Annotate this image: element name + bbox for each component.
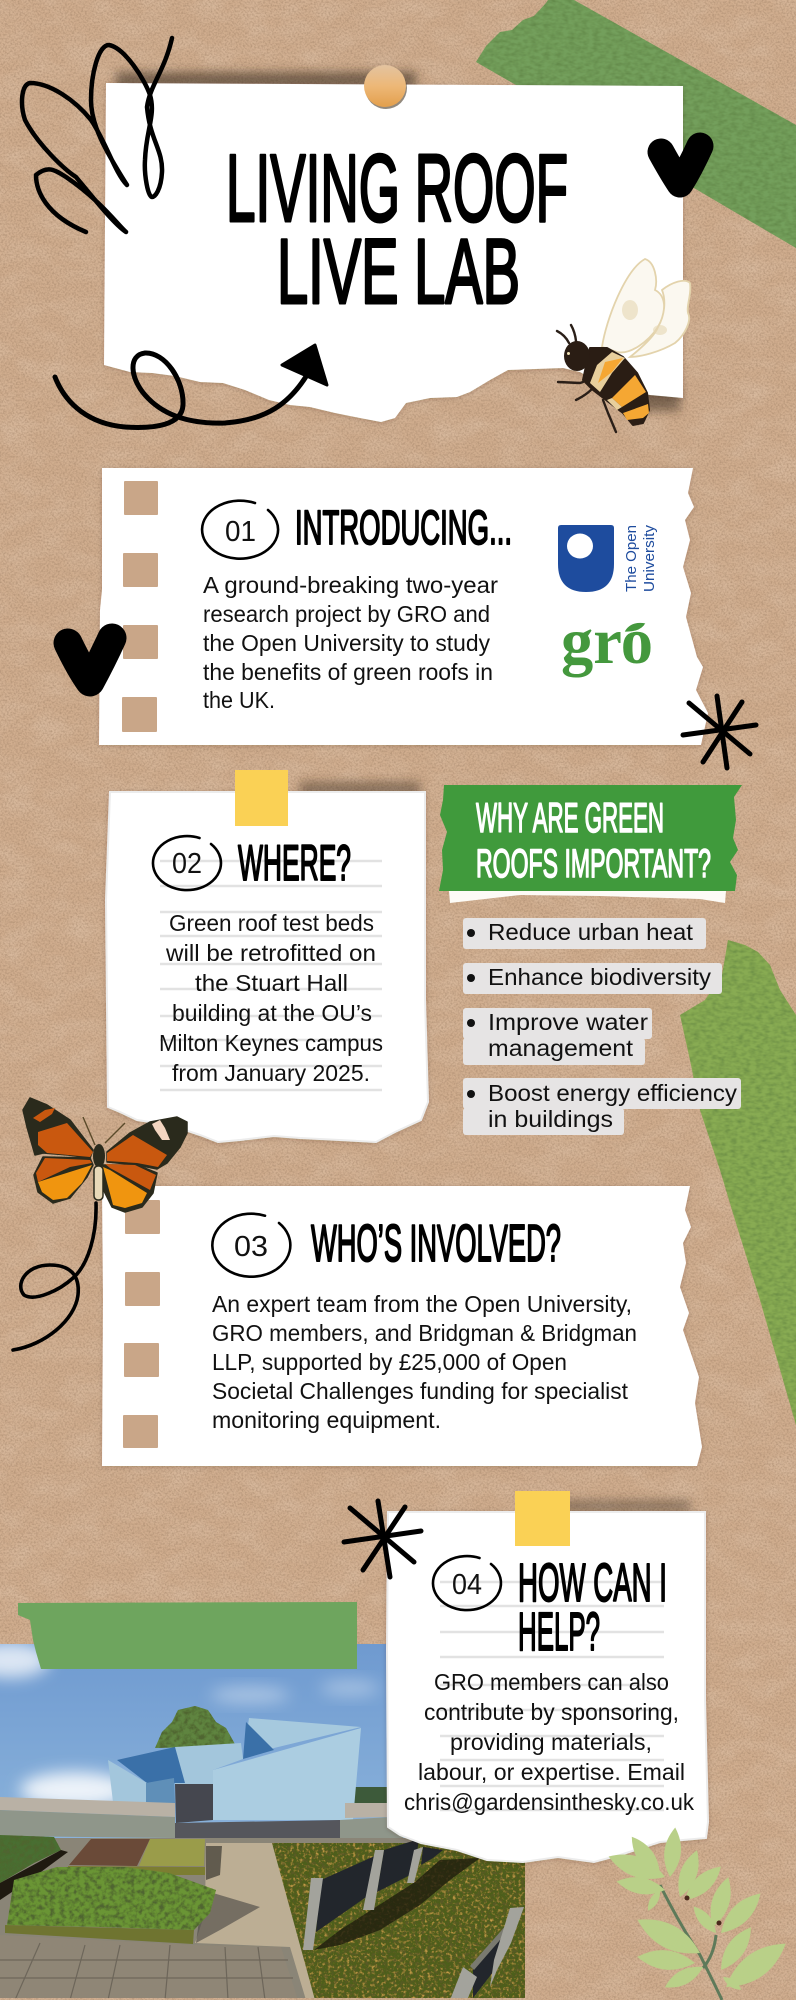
number badge 04: 04 (452, 1569, 482, 1601)
body text 01: the benefits of green roofs in (203, 659, 493, 685)
panel: 03 who's involved (102, 1186, 702, 1466)
body text 02: the Stuart Hall (195, 970, 348, 996)
icon: heart left (68, 638, 112, 682)
heading: how can I help (518, 1553, 667, 1662)
ground (0, 1838, 413, 1998)
body text 01: research project by GRO and (203, 601, 490, 627)
body text 02: Green roof test beds (169, 910, 374, 936)
logo: Open University (558, 525, 658, 592)
number badge 01: 01 (225, 516, 256, 548)
tree (155, 1706, 236, 1748)
item: improve water management: management (488, 1035, 634, 1061)
panel: why green roofs (439, 785, 742, 903)
body text 04: labour, or expertise. Email (418, 1759, 685, 1785)
body text 03: Societal Challenges funding for specialist (212, 1378, 629, 1404)
item: enhance biodiversity (463, 963, 722, 994)
item: reduce urban heat (463, 918, 706, 949)
yellow tape 02 (235, 770, 288, 826)
title (226, 135, 568, 323)
body text 01 (203, 572, 498, 713)
body text 04: chris@gardensinthesky.co.uk (404, 1789, 694, 1815)
green tape top right (476, 0, 796, 248)
item: improve water management (463, 1008, 652, 1065)
body text 04: GRO members can also (434, 1669, 669, 1695)
ruled lines (440, 1582, 664, 1810)
number badge 03: 03 (234, 1231, 268, 1263)
item: boost energy efficiency: Boost energy efficiency (488, 1080, 738, 1106)
banner heading (476, 794, 711, 886)
number badge 04 (433, 1556, 501, 1610)
yellow tape 04 (515, 1491, 570, 1546)
body text 01: the UK. (203, 687, 275, 713)
body text 02: building at the OU’s (172, 1000, 372, 1026)
body text 02: from January 2025. (172, 1060, 370, 1086)
solar panels (303, 1839, 524, 2000)
body text 01: A ground-breaking two-year (203, 572, 498, 598)
body text 03: monitoring equipment. (212, 1407, 441, 1433)
paving joints (0, 1943, 293, 2000)
punched holes (123, 1200, 160, 1448)
body text 04 (404, 1669, 694, 1815)
photo: green roof render (0, 1642, 525, 2000)
body text 04: contribute by sponsoring, (424, 1699, 679, 1725)
scribble top left (22, 38, 172, 232)
body text 02: Milton Keynes campus (159, 1030, 383, 1056)
logo: Open University: The Open (623, 525, 640, 592)
item: boost energy efficiency (463, 1078, 741, 1135)
arrow: curly arrow (55, 345, 327, 427)
panel: 02 where (106, 782, 428, 1142)
body text 01: the Open University to study (203, 630, 490, 656)
number badge 01 (202, 501, 278, 559)
body text 02: will be retrofitted on (165, 940, 376, 966)
raised beds (0, 1835, 61, 1883)
logo: GRO: gro (561, 605, 653, 678)
body text 03: LLP, supported by £25,000 of Open (212, 1349, 567, 1375)
panel: 04 how can I help (387, 1500, 708, 1862)
item: enhance biodiversity: Enhance biodiversity (488, 964, 712, 990)
punched holes (122, 481, 158, 732)
icon: star right (683, 696, 756, 768)
logo: Open University: University (641, 525, 658, 592)
icon: leafy plant (605, 1827, 793, 2000)
icon: heart on title paper (661, 146, 700, 184)
icon: gold pin (364, 65, 407, 109)
title: LIVE LAB (277, 221, 520, 323)
icon: bee (557, 259, 690, 432)
heading: where: WHERE? (238, 835, 351, 891)
item: boost energy efficiency: in buildings (488, 1106, 613, 1132)
body text 03: GRO members, and Bridgman & Bridgman (212, 1320, 637, 1346)
panel: title paper (104, 72, 683, 422)
heading: introducing: INTRODUCING... (295, 502, 512, 555)
body text 04: providing materials, (450, 1729, 652, 1755)
green tape over photo (18, 1602, 357, 1669)
body text 02 (159, 910, 383, 1086)
number badge 02 (153, 836, 221, 890)
ruled lines (160, 861, 382, 1090)
blue pavilion (108, 1718, 361, 1842)
list: reasons (463, 918, 741, 1135)
number badge 03 (212, 1214, 290, 1277)
item: reduce urban heat: Reduce urban heat (488, 919, 694, 945)
panel: 01 introducing (99, 468, 708, 745)
lime tape right (680, 940, 796, 1425)
squiggle string under butterfly (13, 1203, 96, 1350)
icon: star on note 04 (344, 1501, 421, 1577)
heading: who's involved: WHO’S INVOLVED? (311, 1215, 561, 1273)
body text 03 (212, 1291, 637, 1433)
body text 03: An expert team from the Open University, (212, 1291, 632, 1317)
number badge 02: 02 (172, 848, 202, 880)
item: improve water management: Improve water (488, 1009, 648, 1035)
icon: butterfly (23, 1098, 187, 1212)
parapets (0, 1797, 175, 1817)
heading: how can I help: HELP? (518, 1602, 600, 1662)
